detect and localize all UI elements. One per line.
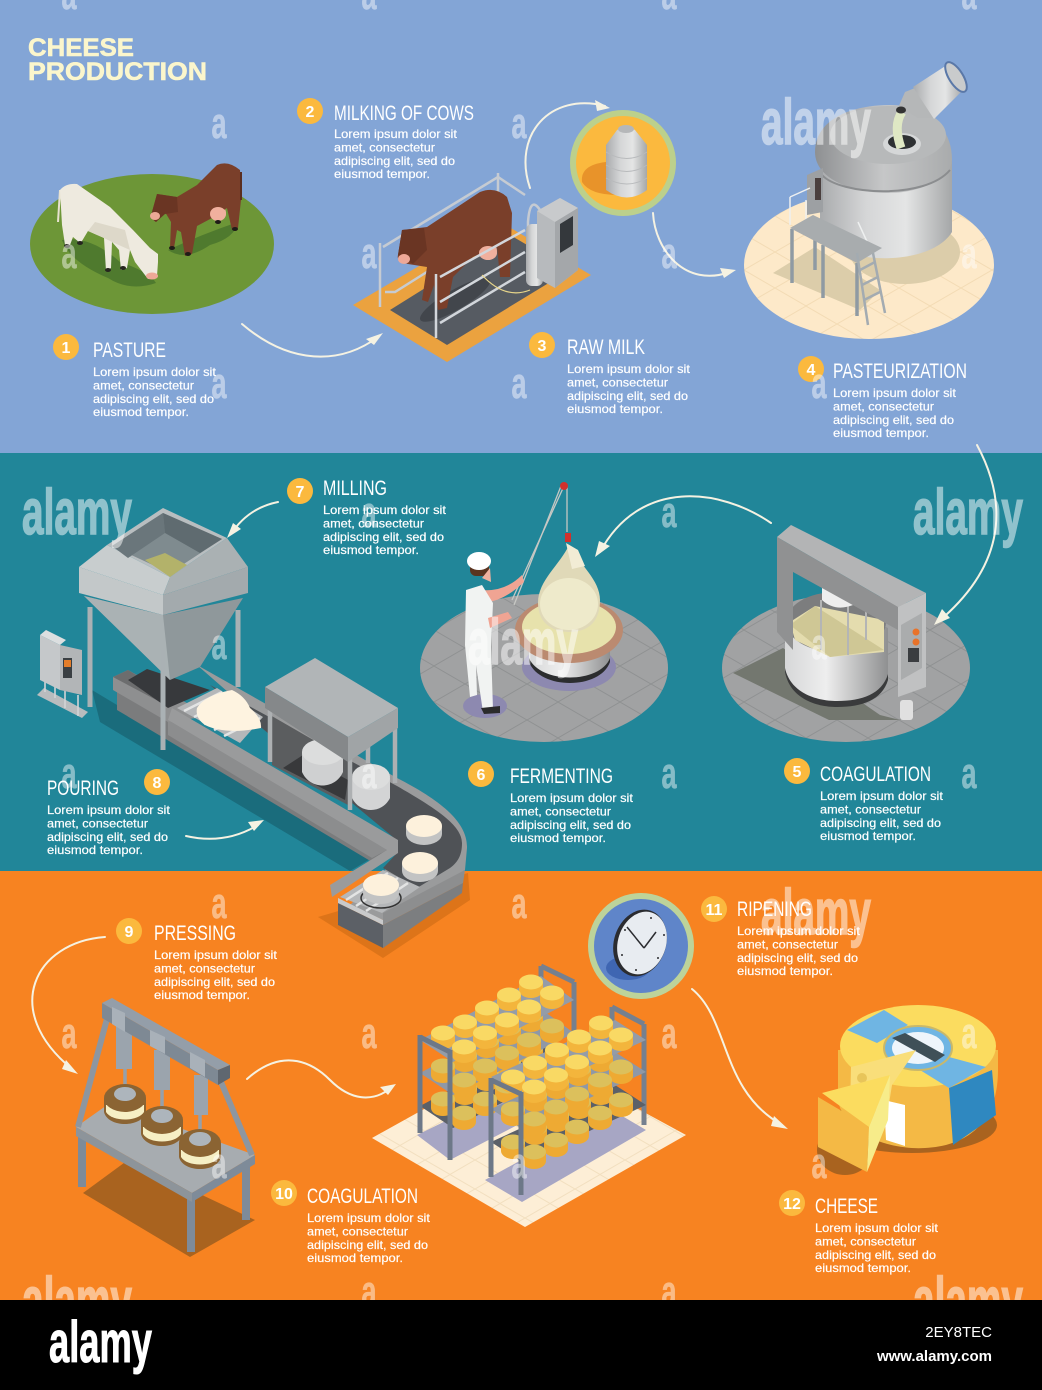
step 3: raw milk: RAW MILK [567,336,645,359]
watermark: repeated stock marks: a [362,749,377,798]
watermark: repeated stock marks: a [662,229,677,278]
step 6: fermenting: adipiscing elit, sed do [510,818,631,832]
watermark: repeated stock marks: a [62,749,77,798]
title [28,34,207,86]
step 3: raw milk: Lorem ipsum dolor sit [567,362,691,376]
sub: front rack [491,1007,646,1195]
step 4: pasteurization: Lorem ipsum dolor sit [833,386,957,400]
step 2: milking of cows: adipiscing elit, sed do [334,154,455,168]
watermark: repeated stock marks: a [962,1009,977,1058]
watermark: repeated stock marks: a [512,1139,527,1188]
step 3: raw milk [529,332,691,416]
arrow: raw milk to pasteurization [653,213,736,278]
watermark: repeated stock marks: a [662,488,677,537]
watermark: repeated stock marks: alamy [22,1264,132,1336]
step 5: coagulation: COAGULATION [820,763,931,786]
step 6: fermenting: eiusmod tempor. [510,831,606,845]
step 4: pasteurization [798,356,967,440]
step 9: pressing: PRESSING [154,922,236,945]
step 12: cheese: eiusmod tempor. [815,1261,911,1275]
step 7: milling: Lorem ipsum dolor sit [323,503,447,517]
step 10: coagulation: adipiscing elit, sed do [307,1238,428,1252]
watermark: repeated stock marks: a [212,879,227,928]
step 5: coagulation: adipiscing elit, sed do [820,816,941,830]
step 8: pouring: Lorem ipsum dolor sit [47,803,171,817]
footer: image id: 2EY8TEC [925,1324,992,1341]
step 7: milling: MILLING [323,477,387,500]
step 1: pasture [53,334,217,419]
step 11: ripening: amet, consectetur [737,938,838,952]
step 11: ripening [701,896,861,978]
panel: orange background [0,871,1042,1300]
step 11: ripening: eiusmod tempor. [737,964,833,978]
step 10: coagulation: eiusmod tempor. [307,1251,403,1265]
step 9: pressing: adipiscing elit, sed do [154,975,275,989]
watermark: repeated stock marks: a [512,879,527,928]
step 10: coagulation: Lorem ipsum dolor sit [307,1211,431,1225]
watermark: repeated stock marks: a [212,1139,227,1188]
step 8: pouring: eiusmod tempor. [47,843,143,857]
watermark: repeated stock marks: a [212,620,227,669]
step 2: milking of cows: eiusmod tempor. [334,167,430,181]
step 6: fermenting: FERMENTING [510,765,613,788]
watermark: repeated stock marks: a [662,749,677,798]
step 4: pasteurization: 4 [807,362,816,379]
step 11: ripening: Lorem ipsum dolor sit [737,924,861,938]
step 3: raw milk: 3 [538,338,547,355]
step 5: coagulation [784,758,944,843]
step 3: raw milk: eiusmod tempor. [567,402,663,416]
watermark: repeated stock marks: a [812,620,827,669]
step 12: cheese: 12 [783,1196,801,1213]
illustration: fermenting worker and vat [420,482,668,742]
arrow: milking to raw milk [525,100,610,188]
step 1: pasture: adipiscing elit, sed do [93,392,214,406]
step 5: coagulation: 5 [793,764,802,781]
step 7: milling: 7 [296,484,305,501]
step 4: pasteurization: eiusmod tempor. [833,426,929,440]
sub: back rack [420,966,574,1160]
step 10: coagulation: 10 [275,1186,293,1203]
icon: clock circle [588,893,694,999]
step 9: pressing [116,918,278,1002]
illustration: milking stall [353,173,591,362]
step 9: pressing: 9 [125,924,134,941]
step 8: pouring: amet, consectetur [47,816,148,830]
watermark: repeated stock marks: a [962,749,977,798]
arrow: to pressing [32,937,105,1074]
step 10: coagulation [271,1180,431,1265]
illustration: pasture with cows [30,163,274,314]
watermark: repeated stock marks: a [62,229,77,278]
panel: blue background [0,0,1042,453]
step 6: fermenting: amet, consectetur [510,804,611,818]
sub: press machine over belt [265,658,398,810]
watermark: repeated stock marks: a [212,99,227,148]
watermark: repeated stock marks: a [62,1009,77,1058]
illustration: coagulation mixer [722,525,970,742]
step 5: coagulation: eiusmod tempor. [820,829,916,843]
step 6: fermenting: Lorem ipsum dolor sit [510,791,634,805]
step 11: ripening: adipiscing elit, sed do [737,951,858,965]
step 1: pasture: amet, consectetur [93,378,194,392]
watermark: repeated stock marks: a [512,99,527,148]
footer bar [0,1300,1042,1390]
watermark: repeated stock marks: alamy [761,86,871,158]
arrow: pasteurization to coagulation [934,445,996,625]
step 8: pouring [47,769,171,857]
step 5: coagulation: amet, consectetur [820,802,921,816]
watermark: repeated stock marks: a [662,1267,677,1316]
step 2: milking of cows: amet, consectetur [334,140,435,154]
watermark: repeated stock marks: a [812,1139,827,1188]
illustration: cheese wheel and wedge [817,1005,998,1175]
step 1: pasture: 1 [62,340,71,357]
watermark: repeated stock marks: a [362,229,377,278]
footer: website: www.alamy.com [876,1348,992,1365]
watermark: repeated stock marks: a [362,1267,377,1316]
step 11: ripening: RIPENING [737,898,812,921]
step 3: raw milk: amet, consectetur [567,376,668,390]
step 8: pouring: adipiscing elit, sed do [47,830,168,844]
step 1: pasture: PASTURE [93,339,166,362]
step 5: coagulation: Lorem ipsum dolor sit [820,789,944,803]
step 12: cheese: CHEESE [815,1195,878,1218]
illustration: pasteurization tank [744,59,994,339]
illustration: cheese press [76,998,255,1257]
step 2: milking of cows [297,98,474,181]
step 7: milling: adipiscing elit, sed do [323,530,444,544]
sub: hopper [79,508,248,750]
watermark: repeated stock marks: alamy [468,606,578,678]
step 9: pressing: amet, consectetur [154,962,255,976]
step 1: pasture: eiusmod tempor. [93,405,189,419]
arrow: pasture to milking [242,324,383,357]
arrow: pouring [186,820,264,839]
step 1: pasture: Lorem ipsum dolor sit [93,365,217,379]
sub: conveyor belt [113,665,467,948]
illustration: ripening racks [372,966,686,1227]
step 12: cheese: amet, consectetur [815,1234,916,1248]
step 9: pressing: Lorem ipsum dolor sit [154,948,278,962]
step 11: ripening: 11 [706,902,723,919]
watermark: repeated stock marks: a [212,359,227,408]
cover: footer overlay [0,1300,1042,1390]
icon: raw milk tank circle [570,110,676,216]
step 7: milling [287,477,447,557]
step 2: milking of cows: 2 [306,104,315,121]
step 6: fermenting [468,761,634,845]
step 10: coagulation: COAGULATION [307,1185,418,1208]
step 4: pasteurization: PASTEURIZATION [833,360,967,383]
arrow: fermenting to milling [227,502,278,538]
step 10: coagulation: amet, consectetur [307,1224,408,1238]
step 8: pouring: POURING [47,777,119,800]
watermark: repeated stock marks: a [362,1009,377,1058]
watermark: repeated stock marks: a [512,359,527,408]
watermark: repeated stock marks: alamy [761,876,871,948]
step 7: milling: amet, consectetur [323,516,424,530]
arrow: ripening to cheese [692,989,788,1129]
title: PRODUCTION [28,58,207,86]
watermark: repeated stock marks: alamy [22,476,132,548]
step 6: fermenting: 6 [477,767,486,784]
step 2: milking of cows: Lorem ipsum dolor sit [334,127,458,141]
step 12: cheese: Lorem ipsum dolor sit [815,1221,939,1235]
step 4: pasteurization: amet, consectetur [833,400,934,414]
watermark: repeated stock marks: a [962,229,977,278]
step 9: pressing: eiusmod tempor. [154,988,250,1002]
sub: control boxes [37,630,88,718]
illustration: hopper and conveyor [37,508,470,958]
step 7: milling: eiusmod tempor. [323,543,419,557]
title: CHEESE [28,34,134,62]
footer: alamy logo: alamy [49,1310,152,1375]
panel: teal background [0,453,1042,871]
step 8: pouring: 8 [153,775,162,792]
arrow: pressing to racks [247,1060,396,1097]
step 3: raw milk: adipiscing elit, sed do [567,389,688,403]
step 12: cheese: adipiscing elit, sed do [815,1248,936,1262]
watermark: repeated stock marks: a [362,488,377,537]
arrow: coagulation to fermenting [595,496,771,557]
step 4: pasteurization: adipiscing elit, sed do [833,413,954,427]
step 12: cheese [779,1190,939,1275]
step 2: milking of cows: MILKING OF COWS [334,102,474,125]
watermark: repeated stock marks: a [812,359,827,408]
watermark: repeated stock marks: a [662,1009,677,1058]
